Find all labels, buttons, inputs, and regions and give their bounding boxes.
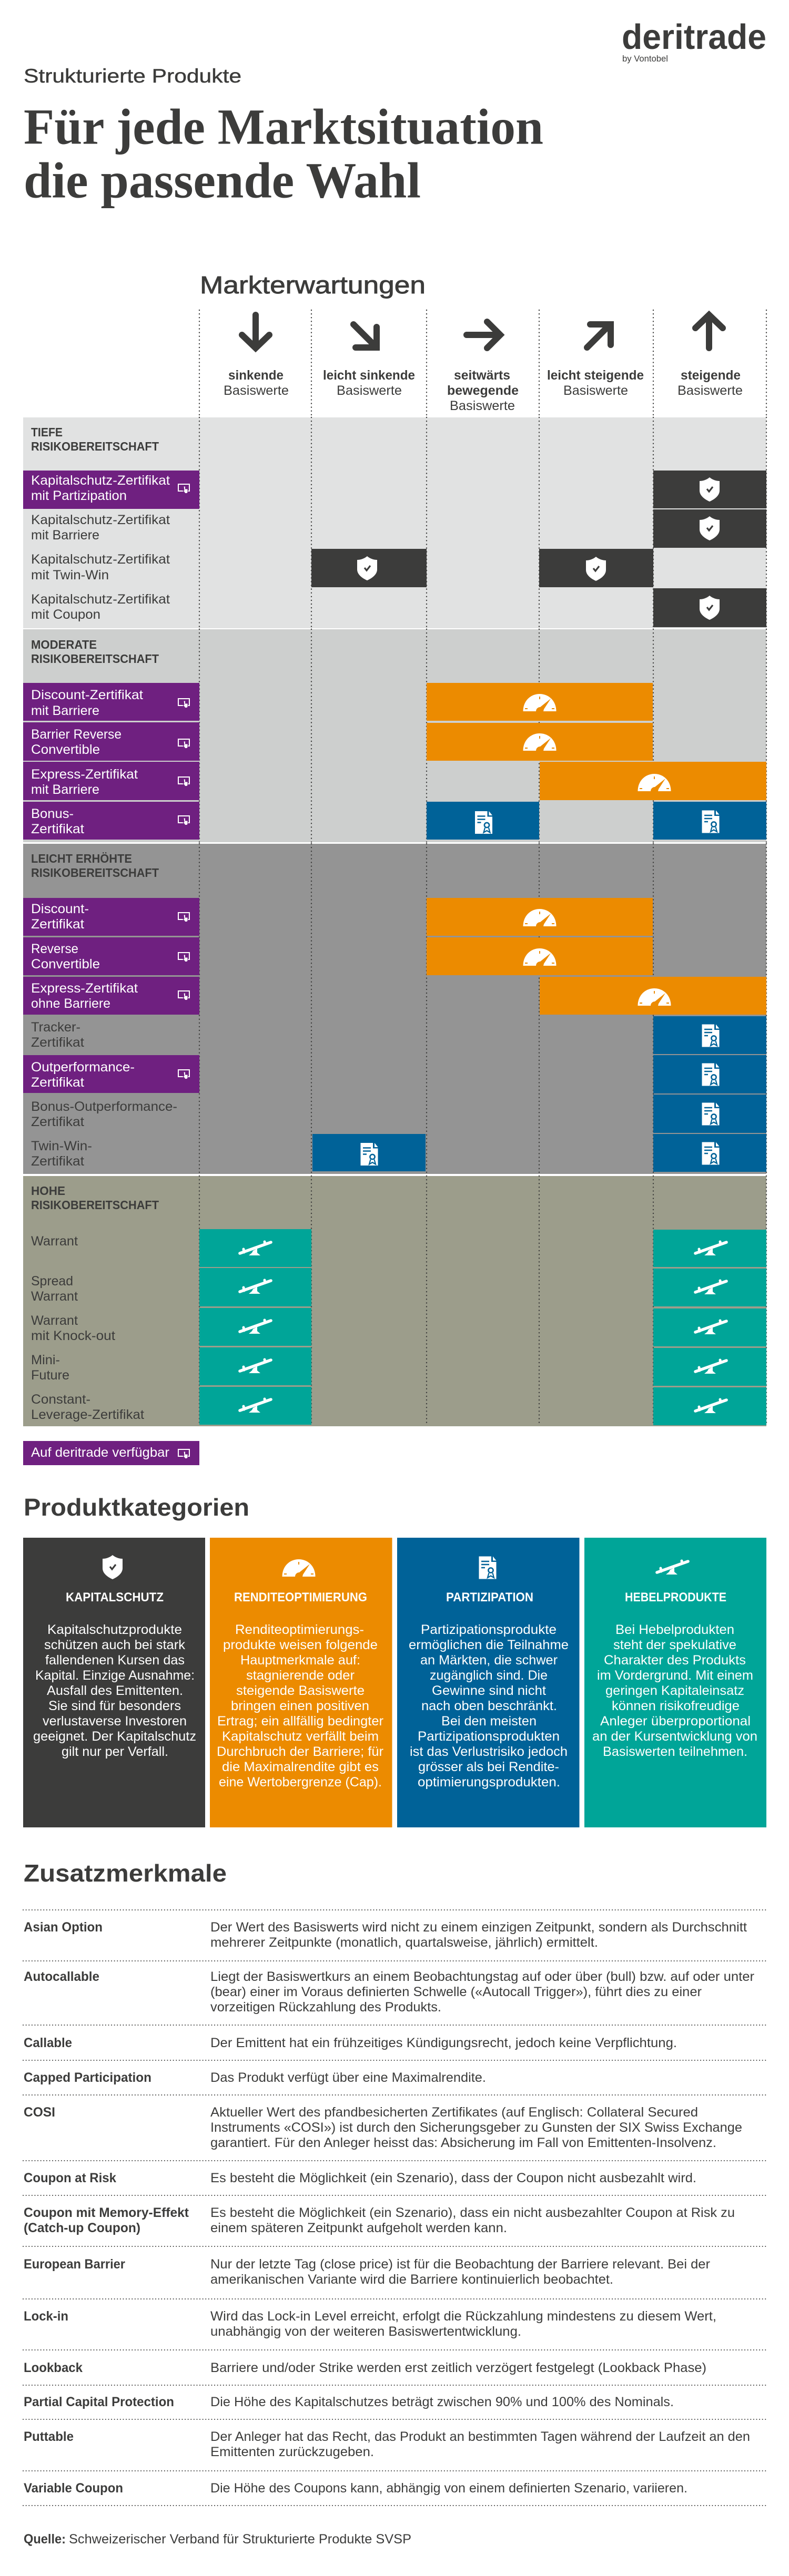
row: Mini-Future bbox=[31, 1353, 69, 1383]
column: steigende: Basiswerte bbox=[677, 383, 743, 398]
row: Bonus-Zertifikat bbox=[23, 802, 199, 840]
legend: Auf deritrade verfügbar bbox=[23, 1441, 199, 1465]
cell: Warrant mit Knock-out steigend bbox=[653, 1309, 766, 1346]
row: Bonus-Zertifikat: Bonus- bbox=[31, 806, 74, 821]
icon: arrow right bbox=[467, 322, 500, 348]
heading: hohe Risikobereitschaft: RISIKOBEREITSCHAFT bbox=[31, 1198, 159, 1212]
row: Express-Zertifikat mit Barriere bbox=[23, 762, 199, 800]
row: Bonus-Outperformance-Zertifikat: Zertifikat bbox=[31, 1115, 84, 1129]
entry: Coupon at Risk: Coupon at Risk bbox=[24, 2171, 116, 2185]
cell: Warrant sinkend bbox=[199, 1229, 311, 1267]
row: Express-Zertifikat ohne Barriere: ohne Barriere bbox=[31, 996, 110, 1011]
cell: Twin-Win leicht sinkend bbox=[311, 549, 427, 587]
card text: produkte weisen folgende bbox=[223, 1638, 378, 1652]
entry: Coupon mit Memory-Effekt: (Catch-up Coupon) bbox=[24, 2221, 140, 2235]
card text: Basiswerten teilnehmen. bbox=[603, 1744, 747, 1759]
card text: eine Wertobergrenze (Cap). bbox=[219, 1775, 382, 1790]
card text: an Märkten, die schwer bbox=[420, 1653, 558, 1668]
entry: Coupon mit Memory-Effekt: einem späteren Zeitpunkt aufgeholt werden kann. bbox=[210, 2221, 507, 2235]
card text: Partizipationsprodukte bbox=[421, 1622, 557, 1637]
entry: COSI: garantiert. Für den Anleger heisst das: Absicherung im Fall von Emittenten-Insolvenz. bbox=[210, 2135, 716, 2150]
cell: Partizipation steigend bbox=[653, 471, 766, 508]
cell: Discount mit Barriere seitwärts bis leicht steigend bbox=[427, 683, 653, 721]
row: Constant-Leverage-Zertifikat: Constant- bbox=[31, 1392, 90, 1407]
column: leicht sinkende bbox=[323, 324, 415, 398]
row: Warrant mit Knock-out: mit Knock-out bbox=[31, 1328, 115, 1343]
row: Express-Zertifikat ohne Barriere bbox=[23, 977, 199, 1015]
card text: im Vordergrund. Mit einem bbox=[597, 1668, 753, 1683]
panel: leicht erhöhte Risikobereitschaft bbox=[23, 844, 766, 1174]
heading: moderate Risikobereitschaft: MODERATE bbox=[31, 638, 97, 651]
card text: Durchbruch der Barriere; für bbox=[217, 1744, 383, 1759]
panel: Hebelprodukte bbox=[584, 1538, 766, 1827]
entry: Capped Participation: Das Produkt verfügt über eine Maximalrendite. bbox=[210, 2070, 486, 2085]
row: Bonus-Outperformance-Zertifikat bbox=[31, 1099, 177, 1129]
row: Reverse Convertible: Convertible bbox=[31, 957, 100, 972]
card heading: RENDITEOPTIMIERUNG bbox=[234, 1590, 367, 1604]
row: Kapitalschutz-Zertifikat mit Coupon: mit Coupon bbox=[31, 607, 100, 622]
row: Reverse Convertible bbox=[23, 937, 199, 975]
column: steigende: steigende bbox=[681, 368, 741, 383]
entry: Asian Option bbox=[24, 1920, 747, 1950]
entry: Autocallable bbox=[24, 1969, 754, 2015]
entry: Lock-in bbox=[24, 2309, 716, 2339]
row: Kapitalschutz-Zertifikat mit Twin-Win: Kapitalschutz-Zertifikat bbox=[31, 552, 170, 567]
column: leicht steigende: leicht steigende bbox=[547, 368, 644, 383]
row: Outperformance-Zertifikat: Outperformance- bbox=[31, 1060, 135, 1075]
row: Kapitalschutz-Zertifikat mit Barriere bbox=[31, 513, 170, 543]
card text bbox=[409, 1622, 569, 1790]
entry: Coupon mit Memory-Effekt: Es besteht die Möglichkeit (ein Szenario), dass ein nicht ausbezahlter Coupon at Risk zu bbox=[210, 2205, 735, 2220]
row: Spread Warrant: Spread bbox=[31, 1274, 73, 1289]
entry: Puttable: Puttable bbox=[24, 2429, 74, 2444]
card text: Kapital. Einzige Ausnahme: bbox=[35, 1668, 195, 1683]
entry: COSI: Aktueller Wert des pfandbesicherten Zertifikates (auf Englisch: Collateral Secured bbox=[210, 2105, 698, 2120]
heading: tiefe Risikobereitschaft bbox=[31, 425, 159, 453]
row: Constant-Leverage-Zertifikat: Leverage-Zertifikat bbox=[31, 1407, 144, 1422]
row: Kapitalschutz-Zertifikat mit Coupon: Kapitalschutz-Zertifikat bbox=[31, 592, 170, 607]
card text: fallendenen Kursen das bbox=[45, 1653, 185, 1668]
entry: Coupon mit Memory-Effekt bbox=[24, 2205, 735, 2235]
heading: moderate Risikobereitschaft: RISIKOBEREITSCHAFT bbox=[31, 652, 159, 666]
card text: zugänglich sind. Die bbox=[430, 1668, 548, 1683]
row: Bonus-Zertifikat: Zertifikat bbox=[31, 822, 84, 836]
row: Barrier Reverse Convertible: Convertible bbox=[31, 742, 100, 757]
entry: Puttable bbox=[24, 2429, 750, 2459]
row: Kapitalschutz-Zertifikat mit Partizipation bbox=[23, 471, 199, 509]
row: Discount-Zertifikat: Zertifikat bbox=[31, 917, 84, 932]
entry: COSI: COSI bbox=[24, 2105, 55, 2120]
entry: Capped Participation: Capped Participation bbox=[24, 2070, 151, 2085]
row: Constant-Leverage-Zertifikat bbox=[31, 1392, 144, 1422]
title: die passende Wahl bbox=[24, 152, 421, 208]
icon: seesaw bbox=[657, 1561, 688, 1575]
row: Twin-Win-Zertifikat: Zertifikat bbox=[31, 1154, 84, 1169]
card text: nach oben beschränkt. bbox=[421, 1699, 557, 1713]
card text: gilt nur per Verfall. bbox=[62, 1744, 168, 1759]
row: Barrier Reverse Convertible bbox=[23, 722, 199, 761]
card text: Renditeoptimierungs- bbox=[235, 1622, 364, 1637]
card text: Partizipationsprodukten bbox=[418, 1729, 560, 1744]
row: Spread Warrant bbox=[31, 1274, 78, 1304]
row: Discount-Zertifikat: Discount- bbox=[31, 902, 89, 916]
row: Kapitalschutz-Zertifikat mit Barriere: mit Barriere bbox=[31, 528, 99, 543]
column: seitwärts bewegende: seitwärts bbox=[454, 368, 510, 383]
row: Twin-Win-Zertifikat: Twin-Win- bbox=[31, 1139, 92, 1153]
entry: COSI bbox=[24, 2105, 742, 2150]
cell: Mini-Future sinkend bbox=[199, 1347, 311, 1385]
heading: hohe Risikobereitschaft: HOHE bbox=[31, 1184, 65, 1198]
legend: Auf deritrade verfügbar: Auf deritrade verfügbar bbox=[31, 1445, 169, 1460]
cell: Barrier Reverse seitwärts bis leicht steigend bbox=[427, 723, 653, 761]
heading: tiefe Risikobereitschaft: RISIKOBEREITSCHAFT bbox=[31, 439, 159, 453]
heading: moderate Risikobereitschaft bbox=[31, 638, 159, 666]
row: Discount-Zertifikat mit Barriere: Discount-Zertifikat bbox=[31, 688, 143, 702]
card text: stagnierende oder bbox=[246, 1668, 355, 1683]
heading: Produktkategorien: Produktkategorien bbox=[24, 1494, 249, 1521]
card text: ermöglichen die Teilnahme bbox=[409, 1638, 569, 1652]
card heading: HEBELPRODUKTE bbox=[625, 1590, 726, 1604]
row: Outperformance-Zertifikat bbox=[23, 1055, 199, 1093]
heading: hohe Risikobereitschaft bbox=[31, 1184, 159, 1212]
row: Mini-Future: Future bbox=[31, 1368, 69, 1383]
row: Express-Zertifikat mit Barriere: Express-Zertifikat bbox=[31, 767, 138, 782]
logo: deritrade by Vontobel: by Vontobel bbox=[622, 54, 668, 64]
icon: document bbox=[479, 1556, 497, 1579]
heading: leicht erhöhte Risikobereitschaft bbox=[31, 852, 159, 880]
entry: Coupon at Risk: Es besteht die Möglichkeit (ein Szenario), dass der Coupon nicht ausbezahlt wird. bbox=[210, 2171, 696, 2185]
card text: schützen auch bei stark bbox=[44, 1638, 186, 1652]
row: Spread Warrant: Warrant bbox=[31, 1289, 78, 1304]
heading: leicht erhöhte Risikobereitschaft: RISIKOBEREITSCHAFT bbox=[31, 866, 159, 880]
source note: Quelle: bbox=[24, 2532, 66, 2547]
panel: moderate Risikobereitschaft bbox=[23, 629, 766, 842]
entry: European Barrier: European Barrier bbox=[24, 2257, 125, 2272]
icon: shield bbox=[103, 1555, 123, 1579]
entry: Lock-in: Lock-in bbox=[24, 2309, 68, 2324]
column: leicht steigende: Basiswerte bbox=[563, 383, 628, 398]
card heading: KAPITALSCHUTZ bbox=[66, 1590, 164, 1604]
cell: Coupon steigend bbox=[653, 588, 766, 627]
card text: die Maximalrendite gibt es bbox=[222, 1760, 379, 1774]
row: Kapitalschutz-Zertifikat mit Twin-Win: mit Twin-Win bbox=[31, 568, 109, 582]
row: Kapitalschutz-Zertifikat mit Partizipation: mit Partizipation bbox=[31, 488, 127, 503]
cell: Warrant steigend bbox=[653, 1230, 766, 1267]
entry: Asian Option: Der Wert des Basiswerts wird nicht zu einem einzigen Zeitpunkt, sondern als Durchschnitt bbox=[210, 1920, 747, 1935]
cell: Discount seitwärts bis leicht steigend bbox=[427, 898, 653, 936]
card text: Ertrag; ein allfällig bedingter bbox=[217, 1714, 383, 1729]
row: Discount-Zertifikat mit Barriere bbox=[23, 683, 199, 721]
logo: deritrade by Vontobel: deritrade bbox=[622, 17, 766, 57]
row: Twin-Win-Zertifikat bbox=[31, 1139, 92, 1169]
row: Kapitalschutz-Zertifikat mit Twin-Win bbox=[31, 552, 170, 582]
entry: Puttable: Der Anleger hat das Recht, das Produkt an bestimmten Tagen während der Laufzeit an den bbox=[210, 2429, 750, 2444]
card text: optimierungsprodukten. bbox=[418, 1775, 560, 1790]
card text: Bei den meisten bbox=[441, 1714, 537, 1729]
cell: Twin-Win leicht sinkend bbox=[312, 1134, 426, 1171]
cell: Twin-Win leicht steigend bbox=[539, 549, 653, 587]
row: Tracker-Zertifikat: Tracker- bbox=[31, 1020, 80, 1035]
cell: Bonus steigend bbox=[653, 802, 766, 840]
card text: grösser als bei Rendite- bbox=[418, 1760, 559, 1774]
row: Warrant: Warrant bbox=[31, 1234, 78, 1249]
entry: Lookback: Barriere und/oder Strike werden erst zeitlich verzögert festgelegt (Lookback Phase) bbox=[210, 2360, 706, 2375]
entry: Partial Capital Protection: Die Höhe des Kapitalschutzes beträgt zwischen 90% und 100% des Nominals. bbox=[210, 2395, 674, 2409]
column: sinkende: sinkende bbox=[228, 368, 284, 383]
title bbox=[24, 99, 543, 208]
entry: European Barrier bbox=[24, 2257, 710, 2287]
cell: Barriere steigend bbox=[653, 509, 766, 548]
heading: tiefe Risikobereitschaft: TIEFE bbox=[31, 425, 63, 439]
heading: Zusatzmerkmale: Zusatzmerkmale bbox=[24, 1859, 227, 1887]
row: Discount-Zertifikat mit Barriere: mit Barriere bbox=[31, 703, 99, 718]
title: Für jede Marktsituation bbox=[24, 99, 543, 155]
entry: Coupon mit Memory-Effekt: Coupon mit Memory-Effekt bbox=[24, 2205, 189, 2220]
card text: können risikofreudige bbox=[612, 1699, 740, 1713]
entry: COSI: Instruments «COSI») ist durch den Sicherungsgeber zu Gunsten der SIX Swiss Exchange bbox=[210, 2120, 742, 2135]
cell: Constant-Leverage sinkend bbox=[199, 1387, 311, 1425]
card text: Bei Hebelprodukten bbox=[615, 1622, 734, 1637]
column: steigende bbox=[677, 315, 743, 398]
source note: Schweizerischer Verband für Strukturierte Produkte SVSP bbox=[69, 2532, 411, 2547]
column: sinkende: Basiswerte bbox=[224, 383, 289, 398]
panel: Renditeoptimierung bbox=[210, 1538, 392, 1827]
entry: Callable: Der Emittent hat ein frühzeitiges Kündigungsrecht, jedoch keine Verpflichtung. bbox=[210, 2036, 677, 2050]
cell: Express leicht steigend bis steigend bbox=[540, 762, 766, 800]
card text bbox=[217, 1622, 383, 1790]
card text bbox=[592, 1622, 757, 1759]
row: Tracker-Zertifikat: Zertifikat bbox=[31, 1035, 84, 1050]
card text: Kapitalschutz verfällt beim bbox=[222, 1729, 379, 1744]
panel: hohe Risikobereitschaft bbox=[23, 1176, 766, 1426]
cell: Spread Warrant steigend bbox=[653, 1269, 766, 1306]
card text: geringen Kapitaleinsatz bbox=[605, 1683, 744, 1698]
row: Bonus-Outperformance-Zertifikat: Bonus-Outperformance- bbox=[31, 1099, 177, 1114]
entry: Callable: Callable bbox=[24, 2036, 72, 2050]
heading: Markterwartungen: Markterwartungen bbox=[200, 271, 426, 299]
icon: arrow up bbox=[695, 315, 723, 348]
cell: Mini-Future steigend bbox=[653, 1348, 766, 1386]
cell: Bonus seitwärts bbox=[427, 802, 539, 840]
panel: tiefe Risikobereitschaft bbox=[23, 417, 766, 628]
entry: European Barrier: amerikanischen Variante wird die Barriere kontinuierlich beobachtet. bbox=[210, 2272, 613, 2287]
entry: Autocallable: Autocallable bbox=[24, 1969, 99, 1984]
entry: Variable Coupon: Die Höhe des Coupons kann, abhängig von einem definierten Szenario, variieren. bbox=[210, 2481, 687, 2496]
cell: Twin-Win steigend bbox=[653, 1134, 766, 1172]
cell: Warrant mit Knock-out sinkend bbox=[199, 1308, 311, 1346]
column: leicht sinkende: Basiswerte bbox=[337, 383, 402, 398]
entry: Lookback: Lookback bbox=[24, 2360, 83, 2375]
market expectation column headers bbox=[199, 310, 766, 417]
entry: Autocallable: vorzeitigen Rückzahlung des Produkts. bbox=[210, 2000, 441, 2015]
card text: Gewinne sind nicht bbox=[432, 1683, 546, 1698]
card text: ist das Verlustrisiko jedoch bbox=[410, 1744, 568, 1759]
cell: Express leicht steigend bis steigend bbox=[540, 977, 766, 1015]
card text: Hauptmerkmale auf: bbox=[240, 1653, 360, 1668]
card text: geeignet. Der Kapitalschutz bbox=[33, 1729, 196, 1744]
row: Outperformance-Zertifikat: Zertifikat bbox=[31, 1075, 84, 1090]
card text: steigende Basiswerte bbox=[236, 1683, 365, 1698]
icon: arrow down-right bbox=[353, 324, 377, 347]
entry: European Barrier: Nur der letzte Tag (close price) ist für die Beobachtung der Barriere relevant. Bei der bbox=[210, 2257, 710, 2272]
card text bbox=[33, 1622, 196, 1759]
row: Warrant mit Knock-out bbox=[31, 1313, 115, 1343]
panel: Partizipation bbox=[397, 1538, 580, 1827]
entry: Variable Coupon: Variable Coupon bbox=[24, 2481, 123, 2496]
cell: Reverse Convertible seitwärts bis leicht steigend bbox=[427, 937, 653, 975]
row: Express-Zertifikat mit Barriere: mit Barriere bbox=[31, 782, 99, 797]
subtitle: Strukturierte Produkte: Strukturierte Produkte bbox=[24, 65, 241, 87]
entry: Lock-in: Wird das Lock-in Level erreicht, erfolgt die Rückzahlung mindestens zu diesem Wert, bbox=[210, 2309, 716, 2324]
card text: Sie sind für besonders bbox=[48, 1699, 181, 1713]
icon: arrow down bbox=[242, 315, 269, 348]
card text: steht der spekulative bbox=[613, 1638, 736, 1652]
column: leicht steigende bbox=[547, 324, 644, 398]
row: Mini-Future: Mini- bbox=[31, 1353, 60, 1367]
entry: Capped Participation bbox=[24, 2070, 486, 2085]
row: Kapitalschutz-Zertifikat mit Partizipation: Kapitalschutz-Zertifikat bbox=[31, 473, 170, 488]
cell: Outperformance steigend bbox=[653, 1055, 766, 1093]
card text: Kapitalschutzprodukte bbox=[47, 1622, 182, 1637]
column: seitwärts bewegende: bewegende bbox=[447, 383, 519, 398]
icon: arrow up-right bbox=[587, 324, 611, 347]
entry: Partial Capital Protection: Partial Capital Protection bbox=[24, 2395, 174, 2409]
row: Reverse Convertible: Reverse bbox=[31, 942, 78, 956]
card text: Charakter des Produkts bbox=[604, 1653, 746, 1668]
card text: Ausfall des Emittenten. bbox=[47, 1683, 183, 1698]
row: Tracker-Zertifikat bbox=[31, 1020, 84, 1050]
heading: leicht erhöhte Risikobereitschaft: LEICHT ERHÖHTE bbox=[31, 852, 132, 865]
entry: Puttable: Emittenten zurückzugeben. bbox=[210, 2445, 374, 2459]
row: Warrant mit Knock-out: Warrant bbox=[31, 1313, 78, 1328]
panel: Kapitalschutz bbox=[23, 1538, 205, 1827]
cell: Constant-Leverage steigend bbox=[653, 1387, 766, 1425]
row: Discount-Zertifikat bbox=[23, 898, 199, 936]
row: Express-Zertifikat ohne Barriere: Express-Zertifikat bbox=[31, 981, 138, 996]
entry: Autocallable: (bear) einer im Voraus definierten Schwelle («Autocall Trigger»), führt dies zu einer bbox=[210, 1985, 702, 1999]
entry: Callable bbox=[24, 2036, 677, 2050]
column: seitwärts bewegende: Basiswerte bbox=[450, 398, 515, 413]
glossary table bbox=[23, 1910, 766, 2506]
row: Barrier Reverse Convertible: Barrier Reverse bbox=[31, 727, 122, 742]
card text: bringen einen positiven bbox=[231, 1699, 369, 1713]
column: sinkende bbox=[224, 315, 289, 398]
entry: Asian Option: mehrerer Zeitpunkte (monatlich, quartalsweise, jährlich) ermittelt. bbox=[210, 1935, 598, 1950]
entry: Lock-in: unabhängig von der weiteren Basiswertentwicklung. bbox=[210, 2324, 521, 2339]
card text: Anleger überproportional bbox=[600, 1714, 751, 1729]
card text: an der Kursentwicklung von bbox=[592, 1729, 757, 1744]
icon: gauge bbox=[282, 1559, 316, 1577]
cell: Tracker steigend bbox=[653, 1016, 766, 1054]
row: Kapitalschutz-Zertifikat mit Coupon bbox=[31, 592, 170, 622]
card text: verlustaverse Investoren bbox=[43, 1714, 187, 1729]
cell: Bonus-Outperformance steigend bbox=[653, 1095, 766, 1133]
entry: Asian Option: Asian Option bbox=[24, 1920, 103, 1935]
column: leicht sinkende: leicht sinkende bbox=[323, 368, 415, 383]
column: seitwärts bewegende bbox=[447, 322, 519, 413]
cell: Spread Warrant sinkend bbox=[199, 1268, 311, 1306]
card heading: PARTIZIPATION bbox=[446, 1590, 533, 1604]
row: Kapitalschutz-Zertifikat mit Barriere: Kapitalschutz-Zertifikat bbox=[31, 513, 170, 527]
entry: Autocallable: Liegt der Basiswertkurs an einem Beobachtungstag auf oder über (bull) bzw. auf oder unter bbox=[210, 1969, 754, 1984]
